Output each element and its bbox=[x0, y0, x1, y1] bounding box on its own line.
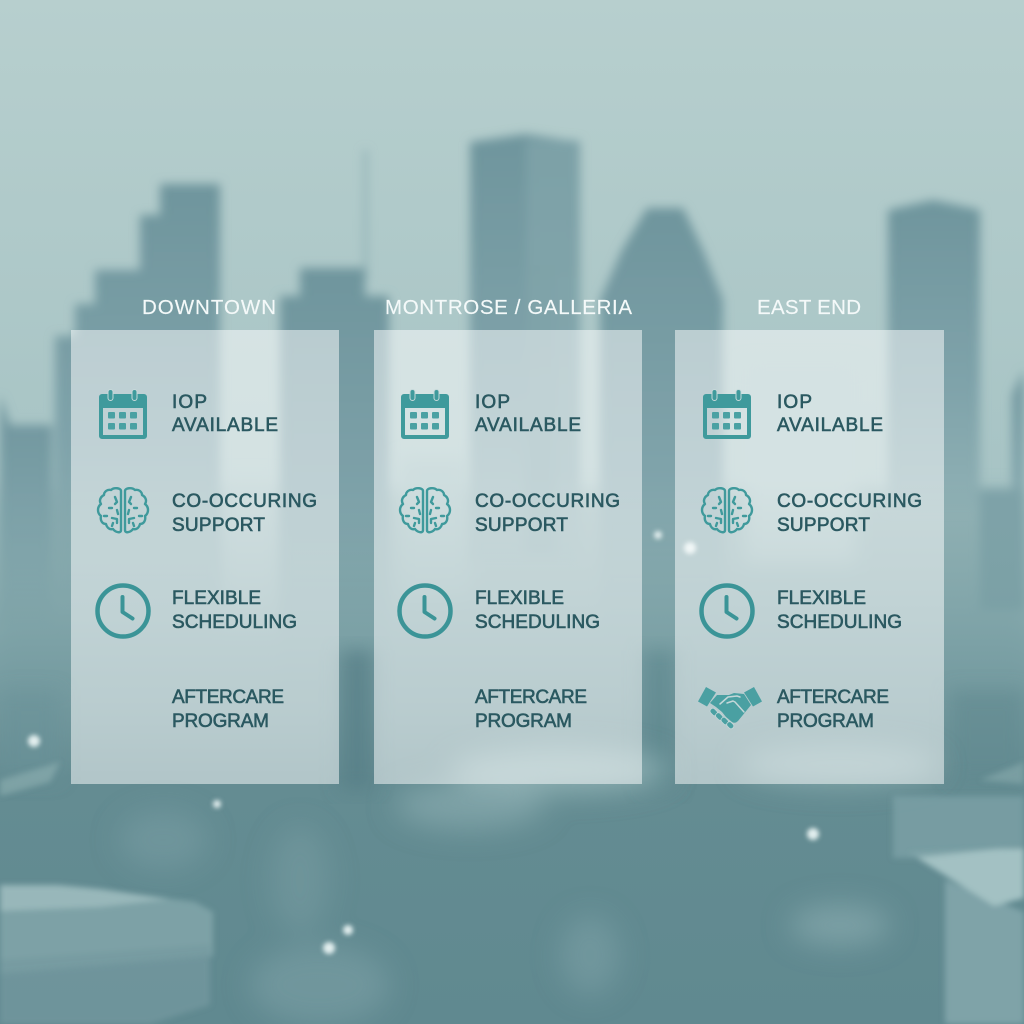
row: IOP available: IOP bbox=[172, 392, 207, 413]
row: IOP available: IOP bbox=[475, 392, 510, 413]
row: flexible scheduling bbox=[400, 586, 600, 636]
heading: East End: EAST END bbox=[757, 296, 861, 319]
row: IOP available bbox=[99, 390, 278, 439]
row: co-occuring support: CO-OCCURING bbox=[777, 491, 922, 512]
row: aftercare program: AFTERCARE bbox=[475, 687, 587, 708]
row: IOP available: AVAILABLE bbox=[172, 415, 278, 436]
row: aftercare program bbox=[475, 687, 587, 732]
row: co-occuring support: SUPPORT bbox=[777, 515, 870, 536]
row: co-occuring support bbox=[400, 488, 620, 536]
row: co-occuring support: CO-OCCURING bbox=[475, 491, 620, 512]
row: flexible scheduling bbox=[98, 586, 297, 636]
icon: handshake bbox=[698, 687, 762, 730]
row: co-occuring support: SUPPORT bbox=[172, 515, 265, 536]
row: IOP available bbox=[703, 390, 883, 439]
row: aftercare program bbox=[172, 687, 284, 732]
row: co-occuring support: SUPPORT bbox=[475, 515, 568, 536]
panel: Downtown bbox=[71, 330, 339, 784]
row: co-occuring support: CO-OCCURING bbox=[172, 491, 317, 512]
row: flexible scheduling: FLEXIBLE bbox=[475, 588, 564, 609]
row: flexible scheduling: FLEXIBLE bbox=[777, 588, 866, 609]
row: IOP available: AVAILABLE bbox=[777, 415, 883, 436]
row: flexible scheduling: SCHEDULING bbox=[475, 612, 600, 633]
row: flexible scheduling: SCHEDULING bbox=[777, 612, 902, 633]
row: flexible scheduling: SCHEDULING bbox=[172, 612, 297, 633]
row: aftercare program: AFTERCARE bbox=[777, 687, 889, 708]
panel: East End bbox=[675, 330, 944, 784]
row: aftercare program: PROGRAM bbox=[777, 711, 874, 732]
row: IOP available: AVAILABLE bbox=[475, 415, 581, 436]
heading: Montrose / Galleria: MONTROSE / GALLERIA bbox=[385, 296, 632, 319]
row: IOP available bbox=[401, 390, 581, 439]
row: aftercare program: AFTERCARE bbox=[172, 687, 284, 708]
panel: Montrose / Galleria bbox=[374, 330, 642, 784]
row: aftercare program bbox=[698, 687, 889, 732]
row: flexible scheduling: FLEXIBLE bbox=[172, 588, 261, 609]
row: aftercare program: PROGRAM bbox=[172, 711, 269, 732]
row: aftercare program: PROGRAM bbox=[475, 711, 572, 732]
row: flexible scheduling bbox=[702, 586, 902, 636]
row: co-occuring support bbox=[702, 488, 922, 536]
heading: Downtown: DOWNTOWN bbox=[142, 296, 276, 319]
row: IOP available: IOP bbox=[777, 392, 812, 413]
row: co-occuring support bbox=[98, 488, 317, 536]
